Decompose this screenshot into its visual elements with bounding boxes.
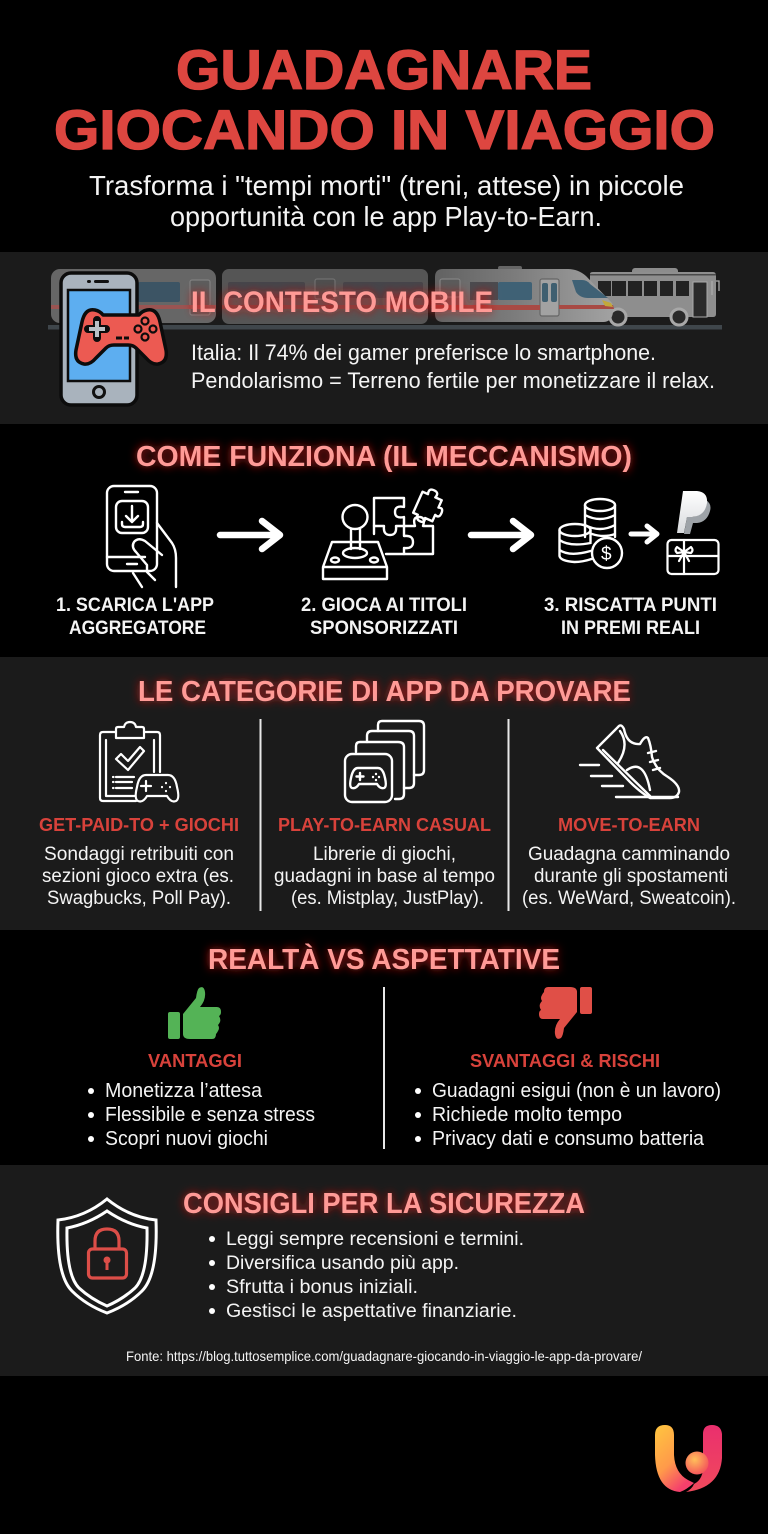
category: move-to-earn: (es. WeWard, Sweatcoin). — [522, 888, 736, 909]
text: context: Italia: Il 74% dei gamer preferisce lo smartphone. — [191, 340, 656, 365]
illustration: train and bus — [48, 266, 722, 330]
icon: joystick and puzzle — [323, 486, 449, 579]
icon: coins to paypal and gift card: $ — [601, 544, 612, 565]
column: svantaggi — [415, 1050, 721, 1150]
step labels: SPONSORIZZATI — [310, 617, 458, 639]
category: move-to-earn — [522, 814, 736, 909]
category: get-paid-to — [39, 814, 239, 909]
divider lines — [260, 719, 510, 911]
arrow — [220, 521, 280, 549]
category: play-to-earn — [274, 814, 495, 909]
subtitle — [89, 170, 684, 232]
step labels: IN PREMI REALI — [561, 617, 700, 639]
list: safety tips: Sfrutta i bonus iniziali. — [226, 1276, 418, 1298]
category: get-paid-to: GET-PAID-TO + GIOCHI — [39, 814, 239, 835]
icon: thumb down — [539, 987, 592, 1039]
logo — [655, 1425, 722, 1492]
heading: categorie: LE CATEGORIE DI APP DA PROVARE — [138, 676, 631, 708]
category: move-to-earn: MOVE-TO-EARN — [558, 814, 700, 835]
category: move-to-earn: Guadagna camminando — [528, 844, 730, 865]
panel: come funziona — [56, 441, 718, 639]
arrow — [471, 521, 531, 549]
small arrow — [631, 526, 657, 542]
column: vantaggi — [88, 1050, 315, 1150]
step labels: 2. GIOCA AI TITOLI — [301, 594, 467, 616]
heading: il contesto mobile: IL CONTESTO MOBILE — [191, 286, 493, 319]
icon: thumb up — [168, 987, 221, 1039]
list: safety tips: Leggi sempre recensioni e termini. — [226, 1228, 524, 1250]
divider — [383, 987, 385, 1149]
text: context — [191, 340, 715, 393]
category: play-to-earn: PLAY-TO-EARN CASUAL — [278, 814, 491, 835]
subtitle: Trasforma i "tempi morti" (treni, attese) in piccole — [89, 170, 684, 201]
step labels — [56, 594, 717, 639]
column: svantaggi: Richiede molto tempo — [432, 1104, 622, 1126]
icon: shield with lock — [58, 1199, 156, 1313]
list: safety tips: Gestisci le aspettative finanziarie. — [226, 1300, 517, 1322]
list: safety tips — [209, 1228, 524, 1322]
icon: stack of game cards — [345, 721, 424, 802]
source: Fonte: https://blog.tuttosemplice.com/guadagnare-giocando-in-viaggio-le-app-da-provare/ — [126, 1348, 642, 1364]
category: move-to-earn: durante gli spostamenti — [534, 866, 728, 887]
text: context: Pendolarismo = Terreno fertile per monetizzare il relax. — [191, 368, 715, 393]
icon: running shoe — [580, 725, 679, 798]
title — [54, 38, 715, 161]
category: play-to-earn: Librerie di giochi, — [313, 844, 456, 865]
paypal mark — [684, 500, 710, 534]
heading: realta: REALTÀ VS ASPETTATIVE — [208, 942, 560, 976]
bus — [590, 268, 719, 325]
panel: consigli per la sicurezza — [0, 1165, 768, 1376]
title: GUADAGNARE — [176, 38, 592, 101]
front car — [435, 266, 614, 322]
icon: coins to paypal and gift card — [560, 491, 718, 574]
icon: clipboard with gamepad — [100, 722, 178, 801]
step labels: 3. RISCATTA PUNTI — [544, 594, 717, 616]
heading: sicurezza: CONSIGLI PER LA SICUREZZA — [183, 1188, 585, 1220]
category: get-paid-to: sezioni gioco extra (es. — [42, 866, 234, 887]
step labels: AGGREGATORE — [69, 617, 206, 639]
column: vantaggi: Scopri nuovi giochi — [105, 1128, 268, 1150]
column: svantaggi: Privacy dati e consumo batteria — [432, 1128, 705, 1150]
category: get-paid-to: Swagbucks, Poll Pay). — [47, 888, 231, 909]
column: vantaggi: VANTAGGI — [148, 1050, 242, 1071]
subtitle: opportunità con le app Play-to-Earn. — [170, 201, 602, 232]
step labels: 1. SCARICA L'APP — [56, 594, 214, 616]
icon: smartphone with gamepad — [61, 273, 166, 405]
category: get-paid-to: Sondaggi retribuiti con — [44, 844, 234, 865]
category: play-to-earn: (es. Mistplay, JustPlay). — [291, 888, 484, 909]
column: svantaggi: Guadagni esigui (non è un lavoro) — [432, 1080, 721, 1102]
panel: il contesto mobile — [0, 252, 768, 424]
column: vantaggi: Flessibile e senza stress — [105, 1104, 315, 1126]
category: play-to-earn: guadagni in base al tempo — [274, 866, 495, 887]
list: safety tips: Diversifica usando più app. — [226, 1252, 459, 1274]
column: vantaggi: Monetizza l’attesa — [105, 1080, 263, 1102]
column: svantaggi: SVANTAGGI & RISCHI — [470, 1050, 660, 1071]
title: GIOCANDO IN VIAGGIO — [54, 98, 715, 161]
icon: phone download — [107, 486, 176, 587]
panel: realta vs aspettative — [88, 942, 721, 1150]
heading: come funziona: COME FUNZIONA (IL MECCANISMO) — [136, 441, 632, 473]
panel: categorie di app — [0, 657, 768, 930]
